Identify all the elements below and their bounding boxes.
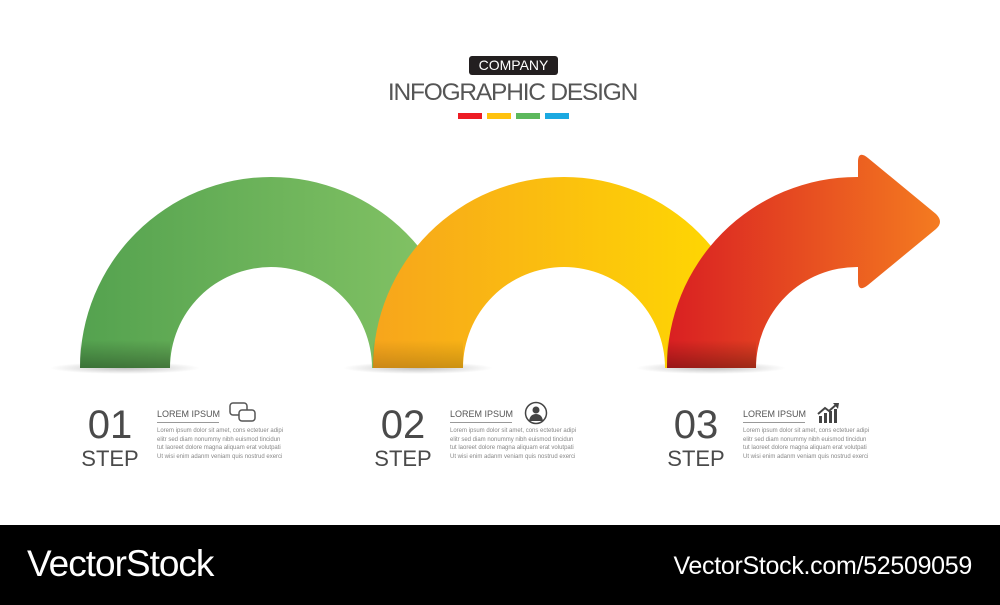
header bbox=[388, 56, 637, 119]
step 3 number: STEP bbox=[667, 446, 725, 471]
step 3 text: Ut wisi enim adanm veniam quis nostrud exerci bbox=[743, 454, 868, 460]
step 2 number: 02 bbox=[381, 403, 425, 447]
arrow: step 3 red bbox=[667, 155, 940, 368]
step 2 text: tut laoreet dolore magna aliquam erat volutpati bbox=[450, 445, 574, 451]
footer bar bbox=[0, 525, 1000, 605]
step 1 number: STEP bbox=[81, 446, 139, 471]
step 1 number: 01 bbox=[88, 403, 132, 447]
step 2 number: STEP bbox=[374, 446, 432, 471]
arc: step 1 green bbox=[80, 177, 462, 368]
step 3 text bbox=[743, 409, 869, 460]
step 2 text bbox=[450, 409, 576, 460]
company badge bbox=[469, 56, 558, 75]
footer url: VectorStock.com/52509059 bbox=[673, 552, 972, 580]
icon: chart bbox=[817, 403, 839, 423]
step 1 text: tut laoreet dolore magna aliquam erat volutpati bbox=[157, 445, 281, 451]
arc: step 2 yellow bbox=[373, 177, 755, 368]
step 1 text: Lorem ipsum dolor sit amet, cons ectetuer adipi bbox=[157, 428, 283, 434]
icon: person bbox=[524, 402, 548, 424]
step 1 text: Ut wisi enim adanm veniam quis nostrud exerci bbox=[157, 454, 282, 460]
color bars bbox=[458, 113, 569, 119]
base shadows bbox=[50, 362, 786, 374]
step 3 text: elitr sed diam nonummy nibh euismod tincidun bbox=[743, 436, 866, 442]
title: INFOGRAPHIC DESIGN bbox=[388, 79, 637, 106]
step 2 text: LOREM IPSUM bbox=[450, 409, 513, 419]
step 3 number: 03 bbox=[674, 403, 718, 447]
company badge: COMPANY bbox=[479, 57, 548, 73]
step 3 text: LOREM IPSUM bbox=[743, 409, 806, 419]
arc chart bbox=[60, 154, 940, 373]
step 3 text: tut laoreet dolore magna aliquam erat volutpati bbox=[743, 445, 867, 451]
step 3 text: Lorem ipsum dolor sit amet, cons ectetuer adipi bbox=[743, 428, 869, 434]
step 1 text: LOREM IPSUM bbox=[157, 409, 220, 419]
icon: chat bbox=[229, 402, 256, 422]
step 1 text: elitr sed diam nonummy nibh euismod tincidun bbox=[157, 436, 280, 442]
step 2 text: Lorem ipsum dolor sit amet, cons ectetuer adipi bbox=[450, 428, 576, 434]
step 3 number bbox=[667, 403, 725, 471]
step 2 number bbox=[374, 403, 432, 471]
footer logo: VectorStock bbox=[27, 543, 213, 584]
step 2 text: Ut wisi enim adanm veniam quis nostrud exerci bbox=[450, 454, 575, 460]
bottom dark tint bbox=[80, 340, 756, 368]
step 1 number bbox=[81, 403, 139, 471]
step 2 text: elitr sed diam nonummy nibh euismod tincidun bbox=[450, 436, 573, 442]
step 1 text bbox=[157, 409, 283, 460]
